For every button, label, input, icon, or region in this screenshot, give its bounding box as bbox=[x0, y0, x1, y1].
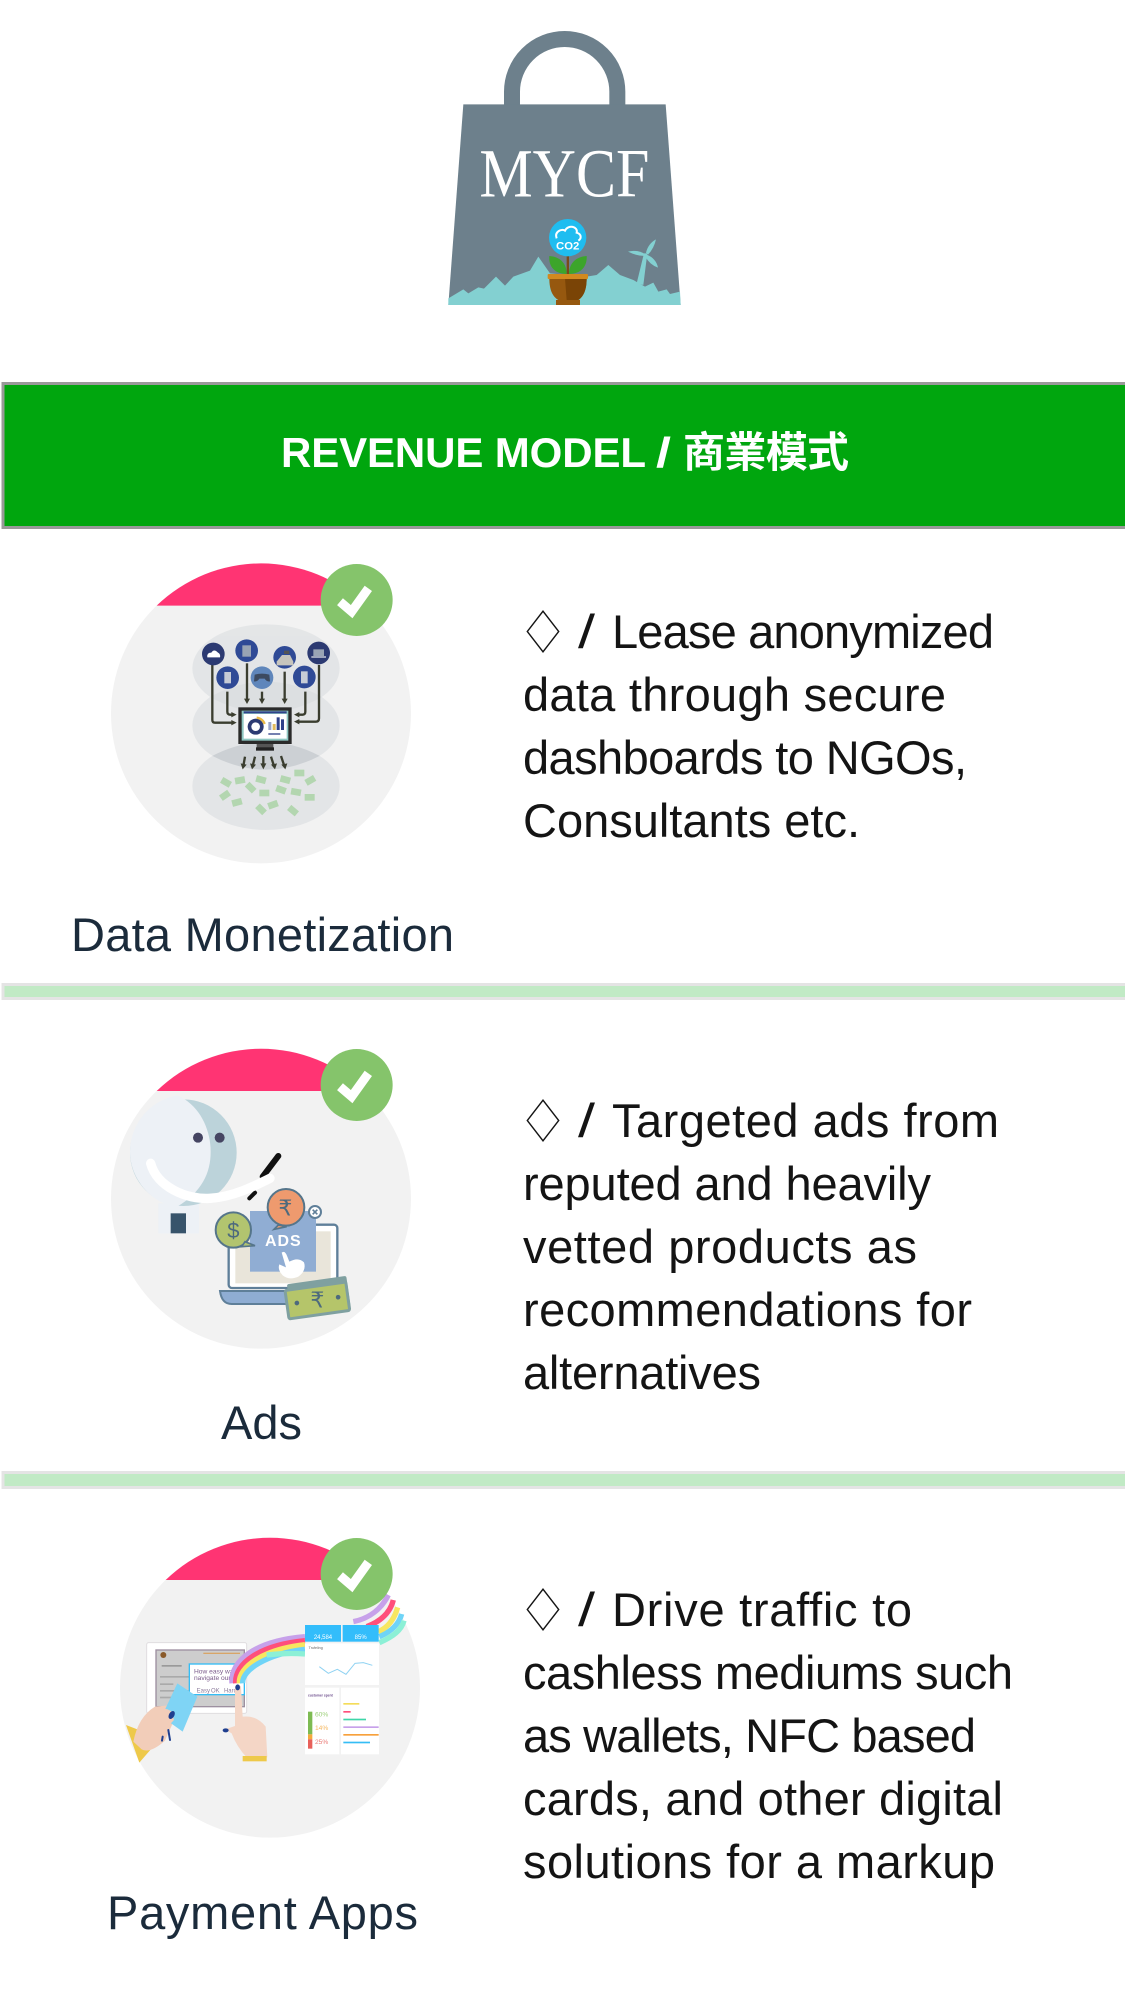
illustration: data monetization bbox=[111, 563, 411, 863]
description: data monetization: ◇ bbox=[526, 609, 560, 658]
description: ads: alternatives bbox=[523, 1346, 761, 1399]
banner title: / bbox=[656, 429, 671, 476]
illustration: payment apps: 14% bbox=[315, 1725, 328, 1732]
logo wind turbine bbox=[628, 239, 658, 285]
illustration: ads bbox=[111, 1049, 411, 1349]
illustration: payment apps: 24,584 bbox=[314, 1635, 333, 1641]
logo CO2 plant bbox=[548, 219, 588, 305]
banner title: REVENUE MODEL bbox=[281, 429, 646, 476]
illustration: payment apps: Easy bbox=[197, 1689, 210, 1695]
label: data monetization: Data Monetization bbox=[71, 908, 454, 961]
illustration: payment apps: Trufeling bbox=[309, 1646, 323, 1650]
description: data monetization: Consultants etc. bbox=[523, 794, 860, 847]
logo mountains bbox=[448, 257, 681, 305]
cash bills bbox=[219, 770, 316, 816]
panel: data monetization bbox=[71, 563, 994, 961]
description: payment apps: cards, and other digital bbox=[523, 1772, 1003, 1825]
description: data monetization: data through secure bbox=[523, 668, 946, 721]
description: payment apps: as wallets, NFC based bbox=[523, 1709, 976, 1762]
description: ads: recommendations for bbox=[523, 1283, 972, 1336]
description: payment apps bbox=[523, 1583, 1013, 1888]
panel: payment apps bbox=[107, 1538, 1013, 1939]
description: ads: vetted products as bbox=[523, 1220, 917, 1273]
hand holding card bbox=[126, 1683, 197, 1763]
description: ads: Targeted ads from bbox=[612, 1094, 999, 1147]
illustration: payment apps: Hard bbox=[224, 1689, 237, 1695]
description: ads: ◇ bbox=[526, 1098, 560, 1147]
description: ads: / bbox=[578, 1094, 596, 1147]
description: ads bbox=[523, 1094, 999, 1399]
illustration: ads: ₹ bbox=[278, 1196, 292, 1221]
divider 2 bbox=[3, 1472, 1125, 1488]
description: data monetization bbox=[523, 605, 994, 847]
panel: ads bbox=[111, 1049, 999, 1449]
illustration: payment apps bbox=[120, 1538, 420, 1838]
illustration: ads: ADS bbox=[265, 1233, 302, 1250]
banner title: 商業模式 bbox=[683, 429, 849, 476]
illustration: payment apps: 60% bbox=[315, 1712, 328, 1719]
description: payment apps: ◇ bbox=[526, 1587, 560, 1636]
label: ads: Ads bbox=[221, 1396, 302, 1449]
hand pointing bbox=[223, 1684, 267, 1761]
header banner bbox=[3, 384, 1125, 528]
description: payment apps: solutions for a markup bbox=[523, 1835, 995, 1888]
divider 1 bbox=[3, 984, 1125, 998]
illustration: payment apps: navigate our site? bbox=[194, 1675, 247, 1682]
logo wordmark: MYCF bbox=[479, 136, 649, 212]
description: data monetization: / bbox=[578, 605, 596, 658]
description: payment apps: Drive traffic to bbox=[612, 1583, 912, 1636]
illustration: ads: ₹ bbox=[310, 1288, 324, 1313]
illustration: ads: $ bbox=[227, 1218, 239, 1243]
description: payment apps: / bbox=[578, 1583, 596, 1636]
description: data monetization: Lease anonymized bbox=[612, 605, 994, 658]
illustration: payment apps: How easy was it to bbox=[194, 1668, 250, 1675]
illustration: payment apps: customer spent bbox=[308, 1694, 334, 1698]
logo: MYCF shopping bag bbox=[448, 39, 681, 305]
illustration: payment apps: OK bbox=[211, 1689, 220, 1695]
logo CO2 plant: CO2 bbox=[556, 240, 579, 252]
label: payment apps: Payment Apps bbox=[107, 1886, 418, 1939]
description: data monetization: dashboards to NGOs, bbox=[523, 731, 967, 784]
description: payment apps: cashless mediums such bbox=[523, 1646, 1013, 1699]
illustration: payment apps: 25% bbox=[315, 1739, 328, 1746]
description: ads: reputed and heavily bbox=[523, 1157, 932, 1210]
illustration: payment apps: 85% bbox=[355, 1635, 367, 1641]
